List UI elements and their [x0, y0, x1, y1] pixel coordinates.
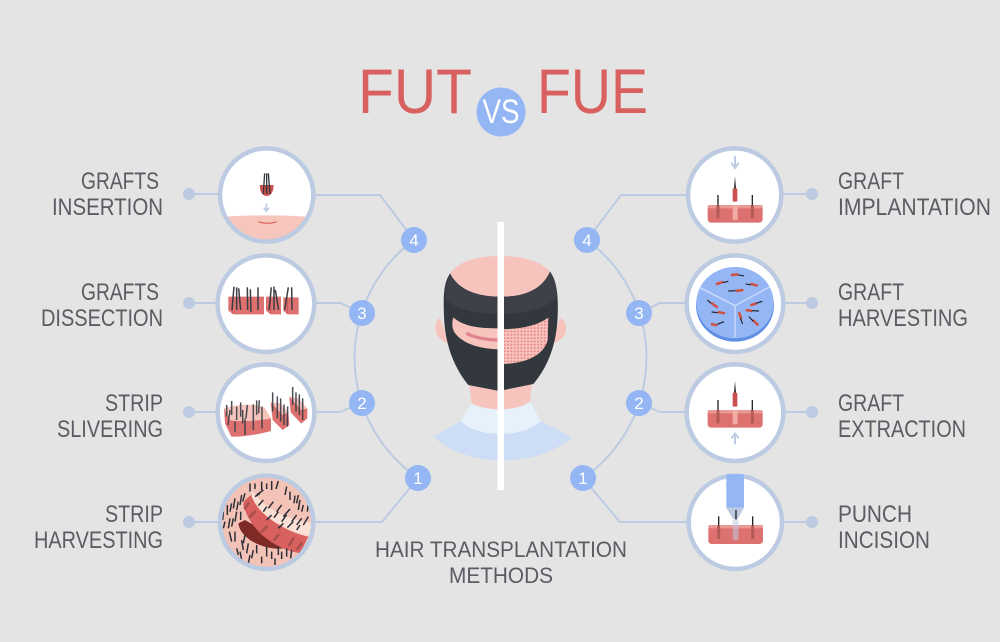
step numbers: right: 1 — [578, 469, 588, 488]
step numbers: right — [570, 227, 652, 491]
labels: right column — [838, 168, 991, 554]
divider line — [498, 222, 504, 490]
icon: grafts dissection — [218, 255, 314, 352]
icon: graft implantation — [688, 148, 781, 242]
labels: left column: SLIVERING — [57, 416, 163, 443]
donor area: punch dots — [500, 318, 548, 364]
icon: graft harvesting — [687, 255, 783, 352]
icon: punch incision — [689, 474, 782, 569]
illustration: head from behind — [433, 256, 572, 460]
labels: left column: STRIP — [105, 390, 163, 417]
labels: right column: INCISION — [838, 527, 930, 554]
labels: right column: GRAFT — [838, 168, 904, 195]
icon: grafts insertion — [220, 148, 313, 247]
labels: right column: GRAFT — [838, 279, 904, 306]
heading: FUE: FUE — [537, 57, 648, 127]
step numbers: right: 4 — [582, 231, 592, 250]
labels: left column: GRAFTS — [81, 168, 159, 195]
title: FUT vs FUE — [358, 57, 648, 136]
labels: left column: DISSECTION — [41, 305, 163, 332]
icon: strip harvesting — [217, 472, 317, 575]
labels: right column: PUNCH — [838, 501, 912, 528]
labels: right column: HARVESTING — [838, 305, 968, 332]
icon: graft extraction — [687, 364, 783, 461]
step numbers: right: 2 — [634, 394, 644, 413]
labels: right column: EXTRACTION — [838, 416, 966, 443]
badge: VS: VS — [482, 93, 520, 131]
labels: left column: GRAFTS — [81, 279, 159, 306]
icon: strip slivering — [218, 364, 314, 461]
scar: strip area — [452, 317, 500, 349]
step numbers: right: 3 — [634, 304, 644, 323]
caption: hair transplantation methods — [375, 537, 627, 588]
connector network: left — [183, 188, 418, 528]
step numbers: left: 3 — [357, 304, 367, 323]
step numbers: left: 2 — [357, 394, 367, 413]
caption: hair transplantation methods: METHODS — [449, 563, 553, 588]
connector network: right — [583, 188, 818, 528]
caption: hair transplantation methods: HAIR TRANSPLANTATION — [375, 537, 627, 562]
labels: left column — [34, 168, 163, 554]
step numbers: left: 4 — [409, 231, 419, 250]
labels: left column: STRIP — [105, 501, 163, 528]
labels: right column: GRAFT — [838, 390, 904, 417]
labels: left column: HARVESTING — [34, 527, 163, 554]
labels: left column: INSERTION — [52, 194, 163, 221]
step numbers: left — [349, 227, 431, 491]
step numbers: left: 1 — [413, 469, 423, 488]
heading: FUT: FUT — [358, 57, 472, 127]
badge: VS — [476, 88, 526, 136]
